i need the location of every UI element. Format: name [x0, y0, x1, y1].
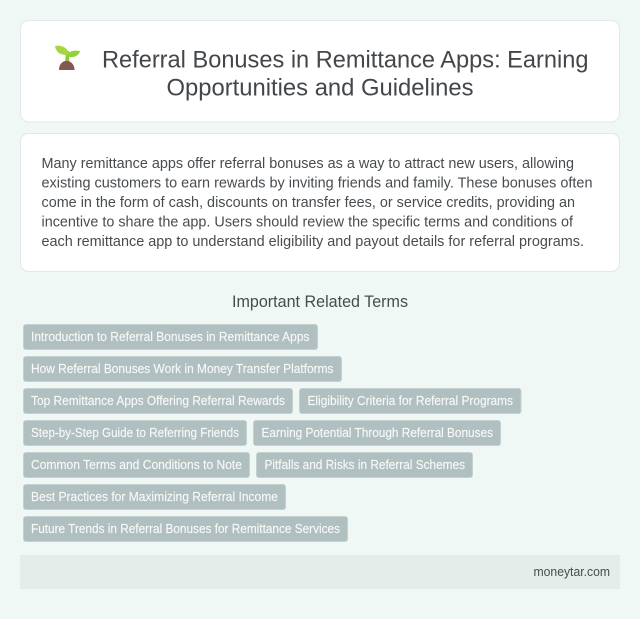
tag: pitfalls — [256, 452, 472, 478]
tag: introduction — [24, 324, 318, 350]
panel: description — [20, 134, 620, 272]
tag: best practices — [24, 484, 286, 510]
icon: sprout — [55, 46, 80, 70]
tag: top apps — [24, 388, 292, 414]
tag: common terms — [24, 452, 250, 478]
tag: pitfalls: Pitfalls and Risks in Referral Schemes — [264, 458, 465, 472]
tag: future trends — [24, 516, 348, 542]
title line 1: Referral Bonuses in Remittance Apps: Earning — [102, 46, 588, 74]
tag: future trends: Future Trends in Referral Bonuses for Remittance Services — [31, 522, 340, 536]
tag: best practices: Best Practices for Maximizing Referral Income — [31, 490, 278, 504]
description line 5: each remittance app to understand eligibility and payout details for referral programs. — [42, 234, 584, 250]
description line 2: existing customers to earn rewards by inviting friends and family. These bonuses often — [42, 176, 592, 192]
tag: eligibility: Eligibility Criteria for Referral Programs — [308, 394, 513, 408]
tag: earning potential — [254, 420, 500, 446]
tag: eligibility — [300, 388, 521, 414]
description line 4: incentive to share the app. Users should review the specific terms and conditions of — [42, 214, 574, 230]
tag: how it works: How Referral Bonuses Work in Money Transfer Platforms — [31, 362, 334, 376]
panel: header — [20, 20, 620, 122]
tag list — [24, 324, 521, 542]
tag: earning potential: Earning Potential Through Referral Bonuses — [262, 426, 493, 440]
tag: how it works — [24, 356, 342, 382]
heading: important related terms: Important Related Terms — [232, 293, 408, 311]
footer source: moneytar.com — [534, 565, 610, 579]
title line 2: Opportunities and Guidelines — [166, 74, 474, 102]
footer — [20, 555, 620, 589]
tag: top apps: Top Remittance Apps Offering Referral Rewards — [31, 394, 285, 408]
tag: common terms: Common Terms and Conditions to Note — [31, 458, 242, 472]
tag: introduction: Introduction to Referral Bonuses in Remittance Apps — [31, 330, 310, 344]
tag: step-by-step: Step-by-Step Guide to Referring Friends — [31, 426, 239, 440]
tag: step-by-step — [24, 420, 246, 446]
description line 3: come in the form of cash, discounts on transfer fees, or service credits, providing an — [42, 195, 575, 211]
description line 1: Many remittance apps offer referral bonuses as a way to attract new users, allowing — [42, 156, 574, 172]
